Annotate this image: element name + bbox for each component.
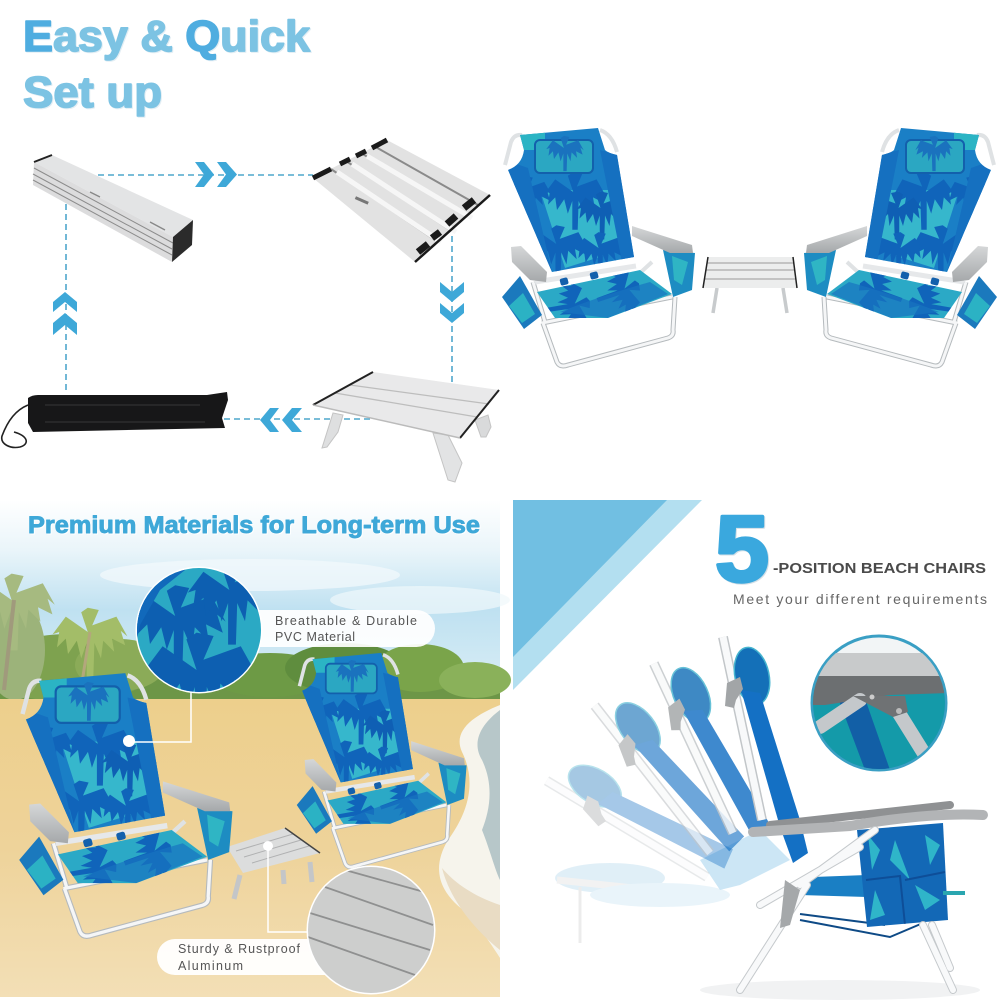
title: Easy & Quick: [23, 12, 311, 61]
side table: [703, 257, 797, 313]
arrow: left: [260, 408, 302, 432]
callout: fabric: Breathable & Durable: [275, 614, 417, 628]
assembled table: [313, 372, 499, 482]
chair right in beach scene: [297, 653, 467, 867]
reclining chair positions: [547, 637, 983, 1000]
numeral 5: 5: [715, 496, 769, 601]
callout: fabric: PVC Material: [275, 630, 355, 644]
callout: aluminum: [157, 841, 437, 995]
chair left in beach scene: [19, 673, 232, 936]
arrow: right: [195, 162, 237, 187]
arrow: down: [440, 282, 464, 323]
small table on beach: [227, 828, 320, 899]
heading: premium materials: Premium Materials for Long-term Use: [28, 512, 480, 539]
unfolded table top: [313, 140, 490, 262]
setup cycle diagram: connecting dashed lines: [66, 175, 452, 419]
inset: hinge detail: [810, 636, 950, 770]
callout: fabric: [123, 560, 435, 747]
heading: position beach chairs: -POSITION BEACH CHAIRS: [773, 561, 986, 577]
carry bag: [2, 392, 228, 447]
chair top right: [804, 128, 997, 366]
title: [23, 12, 311, 117]
folded table: [33, 155, 193, 262]
callout: aluminum: Aluminum: [178, 959, 243, 973]
title: Set up: [23, 68, 162, 117]
panel: premium materials beach scene: [0, 500, 511, 1000]
callout: aluminum: Sturdy & Rustproof: [178, 942, 301, 956]
arrow: up: [53, 292, 77, 335]
chair top left: [502, 128, 695, 366]
decorative corner triangles: [513, 500, 702, 690]
subheading: Meet your different requirements: [733, 591, 987, 607]
